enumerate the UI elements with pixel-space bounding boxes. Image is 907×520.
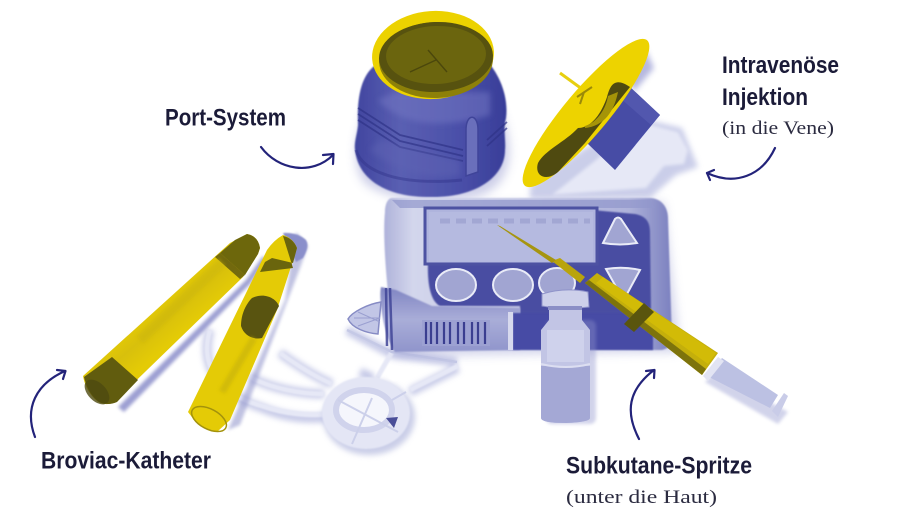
- illustration: Insulin pump: [348, 198, 680, 356]
- dark control panel: [428, 210, 651, 340]
- needle: [560, 73, 582, 89]
- illustration: Port-System: [355, 7, 509, 200]
- icon: infusion set connector: [322, 377, 415, 455]
- cartridge: [380, 287, 520, 352]
- illustration: vial: [541, 290, 596, 424]
- barrel: [585, 273, 718, 375]
- plunger: [707, 358, 778, 408]
- label: Intravenöse Injektion: Intravenöse: [722, 52, 839, 79]
- arrow: Broviac-Katheter: [31, 370, 66, 437]
- cartridge cap: [348, 302, 381, 334]
- illustration: Intravenous cannula with yellow wing: [508, 26, 698, 200]
- dark blue cylinder: [587, 87, 660, 170]
- label: Intravenöse Injektion: (in die Vene): [722, 118, 834, 139]
- label: Port-System: Port-System: [165, 104, 286, 132]
- illustration: syringe: [497, 225, 788, 424]
- yellow lid: [369, 7, 497, 103]
- yellow disc: [508, 26, 664, 200]
- illustration: Broviac catheter tube 2: [188, 232, 308, 437]
- pump buttons: [436, 218, 640, 301]
- label: Broviac-Katheter: Broviac-Katheter: [41, 448, 211, 474]
- arrow: Intravenöse Injektion: [707, 148, 775, 180]
- clear hub: [530, 118, 698, 199]
- label: Intravenöse Injektion: [722, 52, 839, 139]
- label: Subkutane-Spritze: [566, 452, 752, 508]
- arrow: Port-System: [261, 147, 334, 168]
- label: Subkutane-Spritze: (unter die Haut): [566, 487, 717, 508]
- arrow: Subkutane-Spritze: [631, 370, 654, 439]
- illustration: tubing and clear reservoir ring: [207, 330, 458, 455]
- needle hub: [552, 258, 585, 283]
- display: [425, 208, 597, 264]
- label: Intravenöse Injektion: Injektion: [722, 84, 808, 111]
- illustration: Broviac catheter tube 1: [80, 234, 266, 412]
- label: Subkutane-Spritze: Subkutane-Spritze: [566, 452, 752, 480]
